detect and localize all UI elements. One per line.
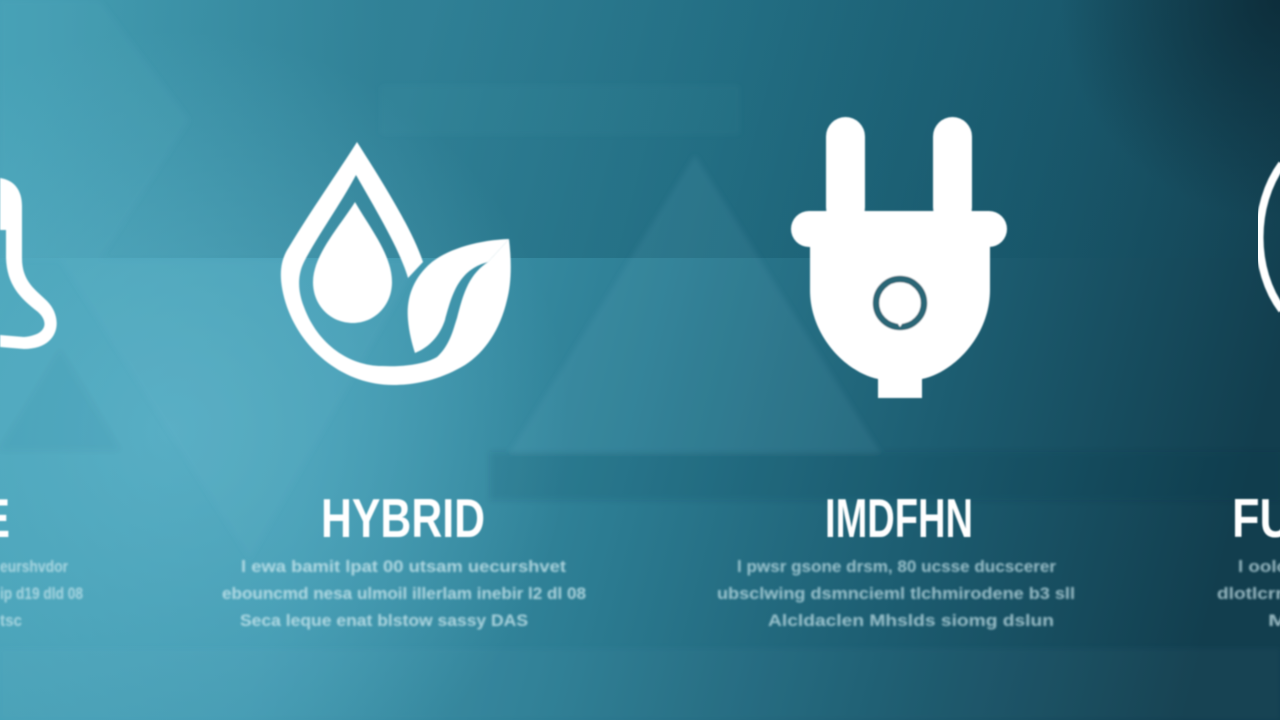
text block: partial right body: [1217, 557, 1280, 630]
text block: plug-in body: Alcldaclen Mhslds siomg dslun: [768, 611, 1054, 630]
text block: hybrid body: Seca leque enat blstow sassy DAS: [240, 611, 528, 630]
text block: hybrid body: ebouncmd nesa ulmoil illerlam inebir l2 dl 08: [222, 584, 586, 603]
text block: hybrid body: l ewa bamit lpat 00 utsam uecurshvet: [241, 557, 566, 576]
text block: partial left body: ip d19 dld 08: [0, 584, 83, 603]
text block: hybrid body: [222, 557, 586, 630]
text block: partial left body: [0, 557, 83, 630]
text block: plug-in body: l pwsr gsone drsm, 80 ucsse ducscerer: [737, 557, 1056, 576]
icon: electric plug: [791, 117, 1007, 398]
text block: partial left body: eurshvdor: [0, 557, 68, 576]
icon: partial left pump hose: [0, 178, 57, 349]
icon: water drop and leaf (hybrid): [281, 142, 511, 385]
text block: plug-in body: ubsclwing dsmncieml tlchmirodene b3 sll: [717, 584, 1075, 603]
text block: partial right body: dlotlcrn: [1217, 584, 1280, 603]
text block: partial left body: tsc: [0, 611, 22, 630]
text block: plug-in body: [717, 557, 1075, 630]
heading: HYBRID: HYBRID: [321, 487, 485, 549]
heading: plug-in label: IMDFHN: [825, 487, 973, 549]
icon: partial right circle: [1260, 164, 1280, 310]
